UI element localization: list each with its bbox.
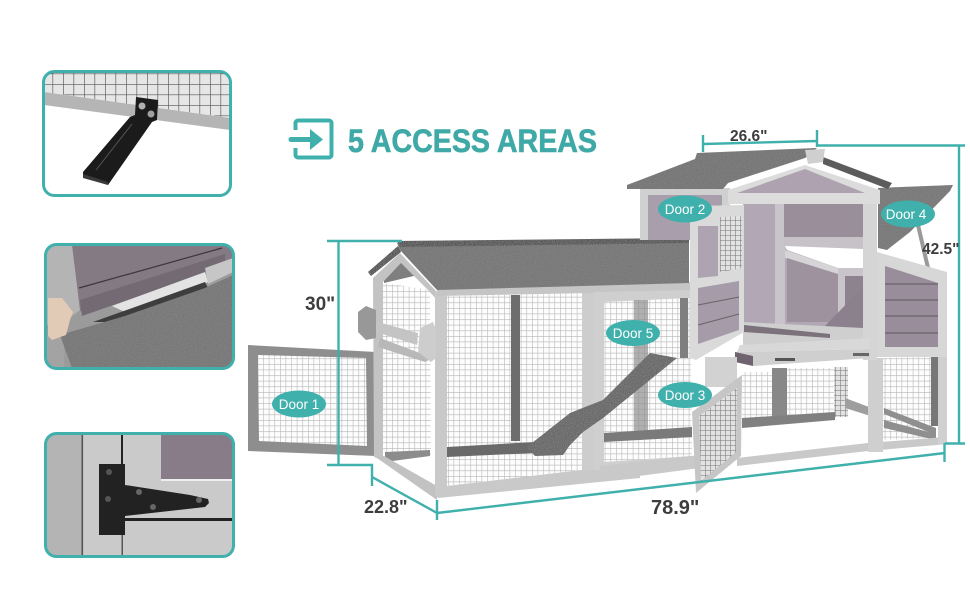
run side wall [373, 253, 437, 500]
thumbnail: door T-hinge [46, 434, 234, 556]
label: door 5: Door 5 [613, 326, 653, 341]
thumbnail: roof hinge strip [46, 244, 234, 368]
upper house wall [640, 188, 730, 240]
heading: 5 access areas: 5 ACCESS AREAS [348, 123, 597, 159]
dimension: 22.8 inch depth: 22.8" [364, 497, 408, 517]
door 2 open [690, 205, 744, 360]
right nest box [877, 252, 947, 357]
icon: entry arrow [291, 120, 332, 158]
dimension: 30 inch height: 30" [305, 294, 335, 315]
label: door 1 [272, 390, 326, 418]
label: door 1: Door 1 [279, 397, 319, 412]
dimension: 22.8 inch depth [364, 477, 437, 520]
label: door 5 [606, 320, 660, 346]
label: door 2 [658, 196, 712, 222]
door 3 open [692, 357, 742, 493]
thumbnail: feeder tray bracket [44, 72, 230, 196]
door 5 with mesh [594, 290, 700, 481]
pull-out tray [735, 338, 870, 366]
door 4 lid [878, 185, 953, 268]
label: door 3 [658, 382, 712, 408]
run roof [368, 238, 689, 290]
heading: 5 access areas [291, 120, 597, 159]
door 1 open on left [248, 345, 376, 456]
perches and brackets [358, 306, 436, 362]
run front mesh [447, 293, 583, 486]
dimension: 26.6 inch width: 26.6" [730, 128, 768, 145]
label: door 3: Door 3 [665, 388, 705, 403]
label: door 4: Door 4 [886, 207, 927, 222]
house interior [743, 203, 870, 348]
dimension: 30 inch height [305, 241, 402, 486]
dimension: 42.5 inch height: 42.5" [922, 241, 960, 258]
dimension: 78.9 inch length [437, 443, 945, 519]
label: door 4 [881, 200, 935, 228]
roof and gable [627, 148, 892, 360]
dimension: 42.5 inch height [817, 146, 965, 444]
label: door 2: Door 2 [665, 202, 705, 217]
hutch illustration [248, 148, 953, 500]
ramp [527, 353, 677, 456]
run posts and rails [435, 282, 690, 498]
dimension: 26.6 inch width [703, 128, 817, 152]
lower legs and rear mesh [737, 350, 948, 466]
dimension: 78.9 inch length: 78.9" [651, 497, 699, 519]
